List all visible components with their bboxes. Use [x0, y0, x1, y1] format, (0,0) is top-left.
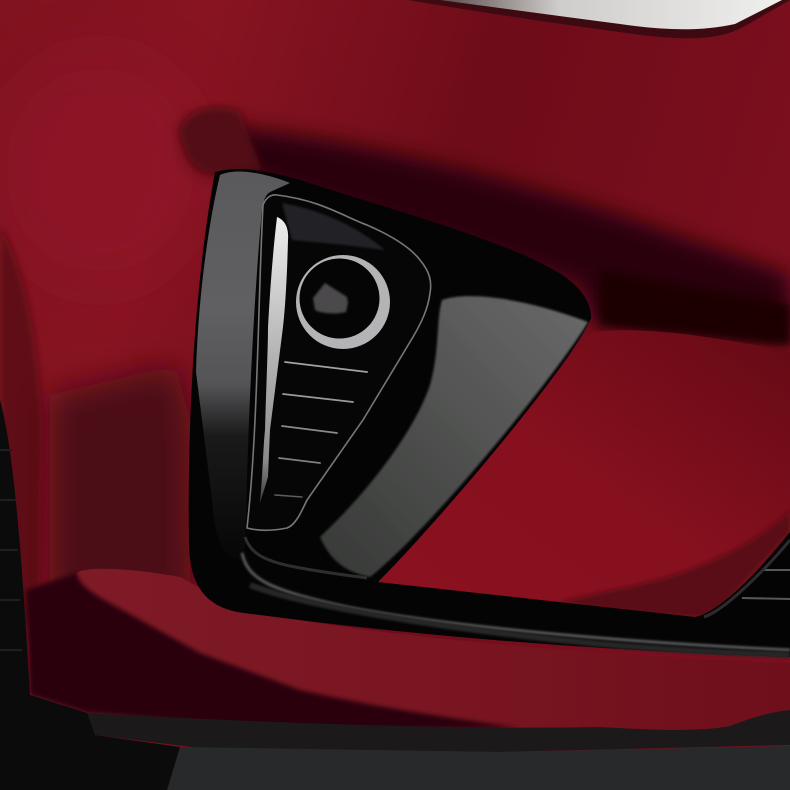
lens facet	[313, 283, 348, 313]
lens body	[300, 258, 380, 338]
headlight	[408, 0, 790, 38]
louvre slats	[275, 362, 367, 497]
lower bumper lip	[26, 569, 790, 730]
lower chrome trim	[242, 537, 790, 655]
darker lower strip of panel	[560, 510, 790, 617]
ground under car	[167, 746, 790, 790]
chrome vertical strip	[260, 217, 288, 503]
dark underside left	[26, 573, 520, 730]
lamp housing left glossy grey bezel	[196, 172, 290, 560]
lower right red panel	[378, 330, 790, 617]
lamp inner recess	[247, 195, 431, 530]
right grey blade panel	[320, 296, 588, 577]
fog lamp	[296, 255, 390, 349]
lamp housing black surround	[189, 169, 790, 657]
upper left red highlight	[0, 50, 210, 290]
intake rim	[704, 540, 790, 617]
dark shadow band above lamp	[179, 107, 790, 345]
textured upper band	[282, 203, 385, 250]
intake slats	[742, 570, 790, 599]
dark shadow under left	[0, 695, 180, 790]
chrome ring	[296, 255, 390, 349]
left wheel arch panel	[0, 225, 190, 700]
lower black trim	[85, 710, 790, 752]
tyre	[0, 400, 30, 720]
